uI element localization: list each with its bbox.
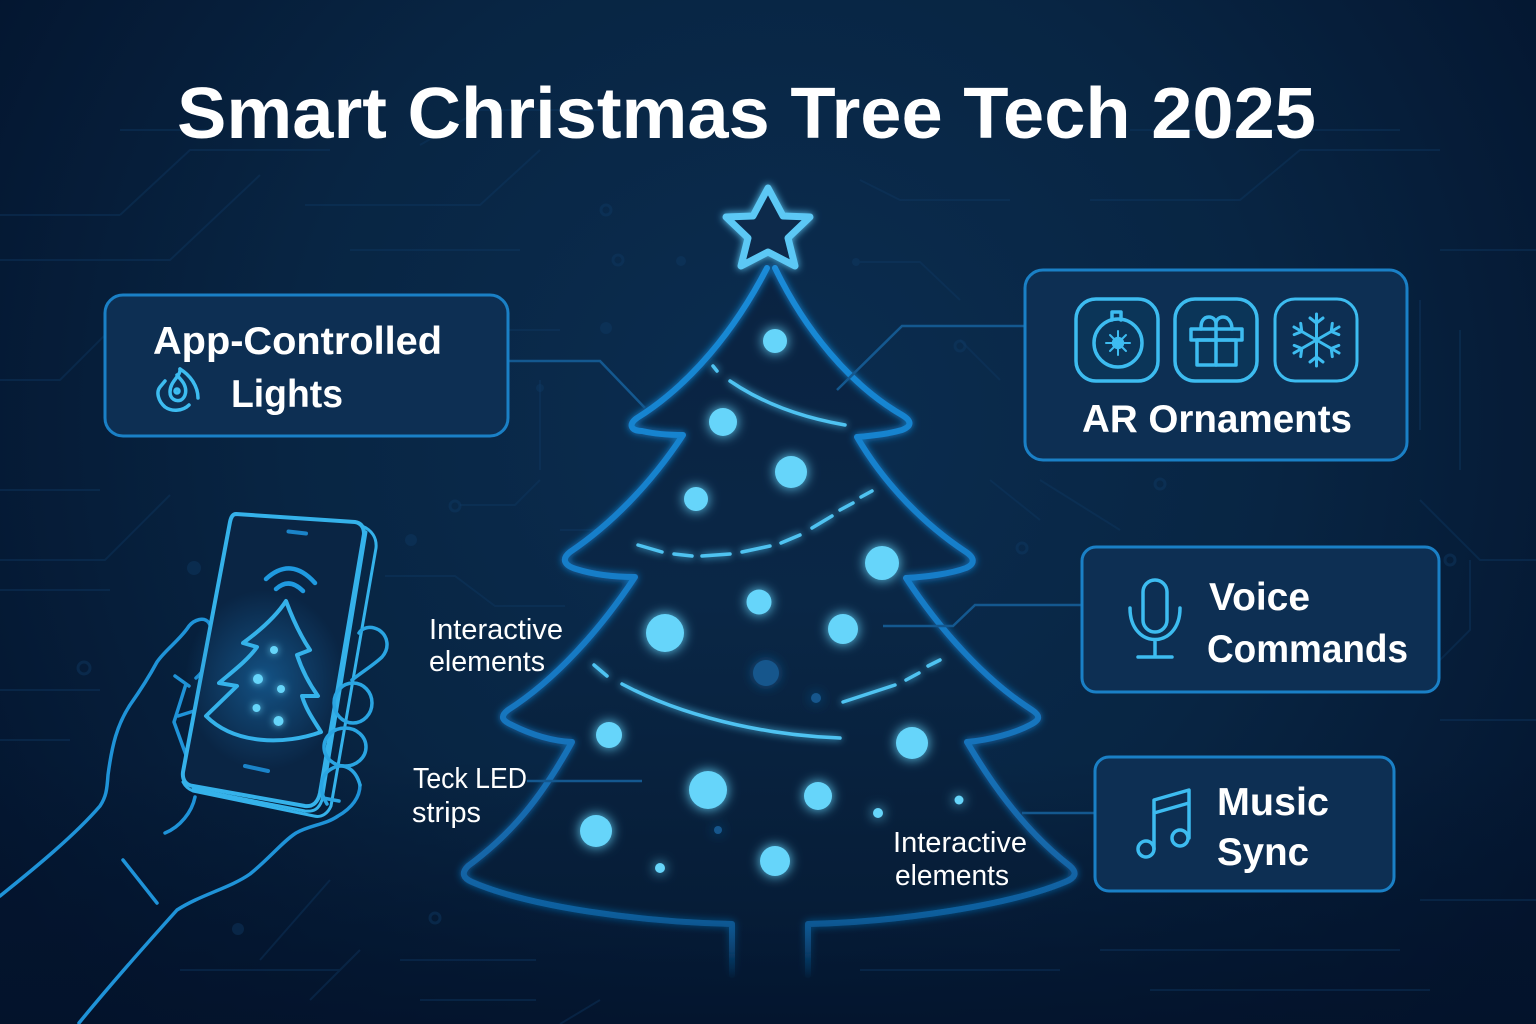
- label: LED strips: [412, 763, 527, 829]
- panel: voice commands: Voice: [1209, 576, 1310, 619]
- panel: music sync: Sync: [1217, 831, 1309, 874]
- ornaments: [580, 329, 964, 876]
- illustration: hand holding phone: [0, 514, 387, 1023]
- label: interactive elements right: [893, 827, 1027, 892]
- icon: gift: [1175, 299, 1257, 381]
- title: Smart Christmas Tree Tech 2025: [177, 74, 1316, 154]
- phone mini tree: [206, 601, 321, 740]
- panel: app-controlled lights: Lights: [231, 373, 343, 416]
- garlands: [594, 366, 940, 738]
- panel: AR ornaments: AR Ornaments: [1082, 398, 1352, 441]
- phone body: [183, 514, 376, 816]
- panel: app-controlled lights: [105, 295, 508, 436]
- phone wifi signal: [266, 568, 315, 591]
- icon: music notes: [1138, 790, 1189, 857]
- tree illustration: [464, 188, 1075, 975]
- label: interactive elements left: Interactive: [429, 614, 563, 646]
- tree outline: [464, 268, 1075, 975]
- connector: music sync to tree: [1022, 812, 1095, 814]
- phone mini tree lights: [252, 646, 285, 726]
- connector: app-controlled lights to tree: [508, 361, 645, 408]
- connector: LED strips label to tree: [527, 780, 642, 782]
- panel: app-controlled lights: App-Controlled: [153, 320, 442, 363]
- tree fill: [464, 268, 1075, 924]
- label: interactive elements right: Interactive: [893, 827, 1027, 859]
- icon: microphone: [1130, 580, 1180, 657]
- label: LED strips: strips: [412, 797, 481, 829]
- label: interactive elements left: [429, 614, 563, 678]
- label: LED strips: Teck LED: [413, 763, 527, 795]
- icon: snowflake: [1275, 299, 1357, 381]
- panel: music sync: [1095, 757, 1394, 891]
- hand outline: [0, 619, 360, 1023]
- label: interactive elements right: elements: [895, 860, 1009, 892]
- panel: AR ornaments: [1025, 270, 1407, 460]
- icon: light signal drop: [158, 369, 198, 410]
- fingers: [321, 627, 387, 804]
- phone glow: [185, 590, 345, 770]
- panel: voice commands: [1082, 547, 1439, 692]
- icon: bauble: [1076, 299, 1158, 381]
- panel: voice commands: Commands: [1207, 628, 1408, 671]
- panel: music sync: Music: [1217, 781, 1329, 824]
- connector: voice commands to tree: [883, 605, 1082, 626]
- label: interactive elements left: elements: [429, 646, 545, 678]
- connector: AR ornaments to tree: [837, 326, 1025, 390]
- star: [726, 188, 810, 266]
